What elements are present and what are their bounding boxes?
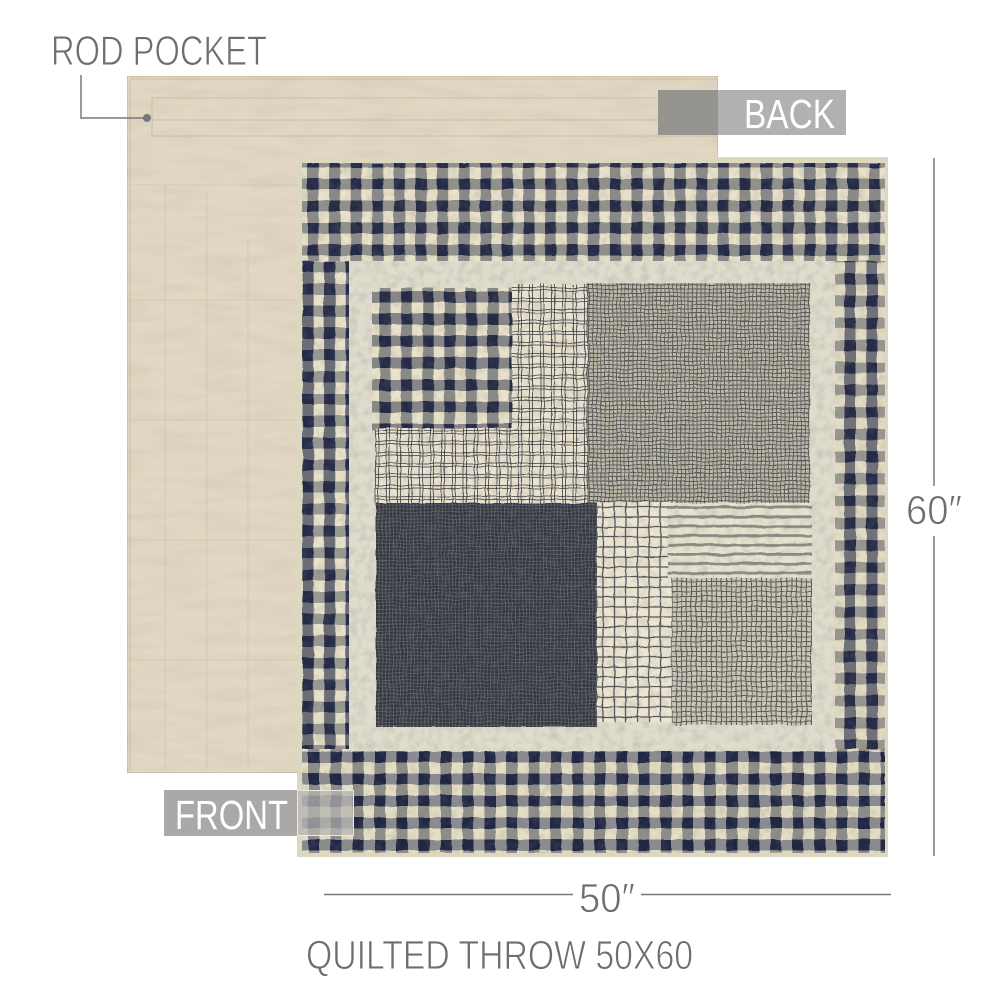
rod pocket leader line [81, 75, 151, 122]
sashing [349, 261, 835, 751]
label: rod pocket: ROD POCKET [51, 27, 267, 74]
dimension: height 60 inches: 60″ [906, 487, 962, 533]
dimension: width 50 inches: 50″ [579, 875, 635, 921]
label: front: FRONT [175, 792, 288, 838]
panel: back of quilt [127, 76, 718, 773]
label: back [658, 90, 846, 137]
rod pocket stitching [130, 79, 718, 770]
panel: front of quilt [297, 157, 888, 857]
title: QUILTED THROW 50X60 [306, 932, 693, 978]
border fabric: gingham bands [302, 163, 885, 853]
label: back: BACK [744, 91, 835, 137]
patchwork blocks [372, 283, 812, 727]
